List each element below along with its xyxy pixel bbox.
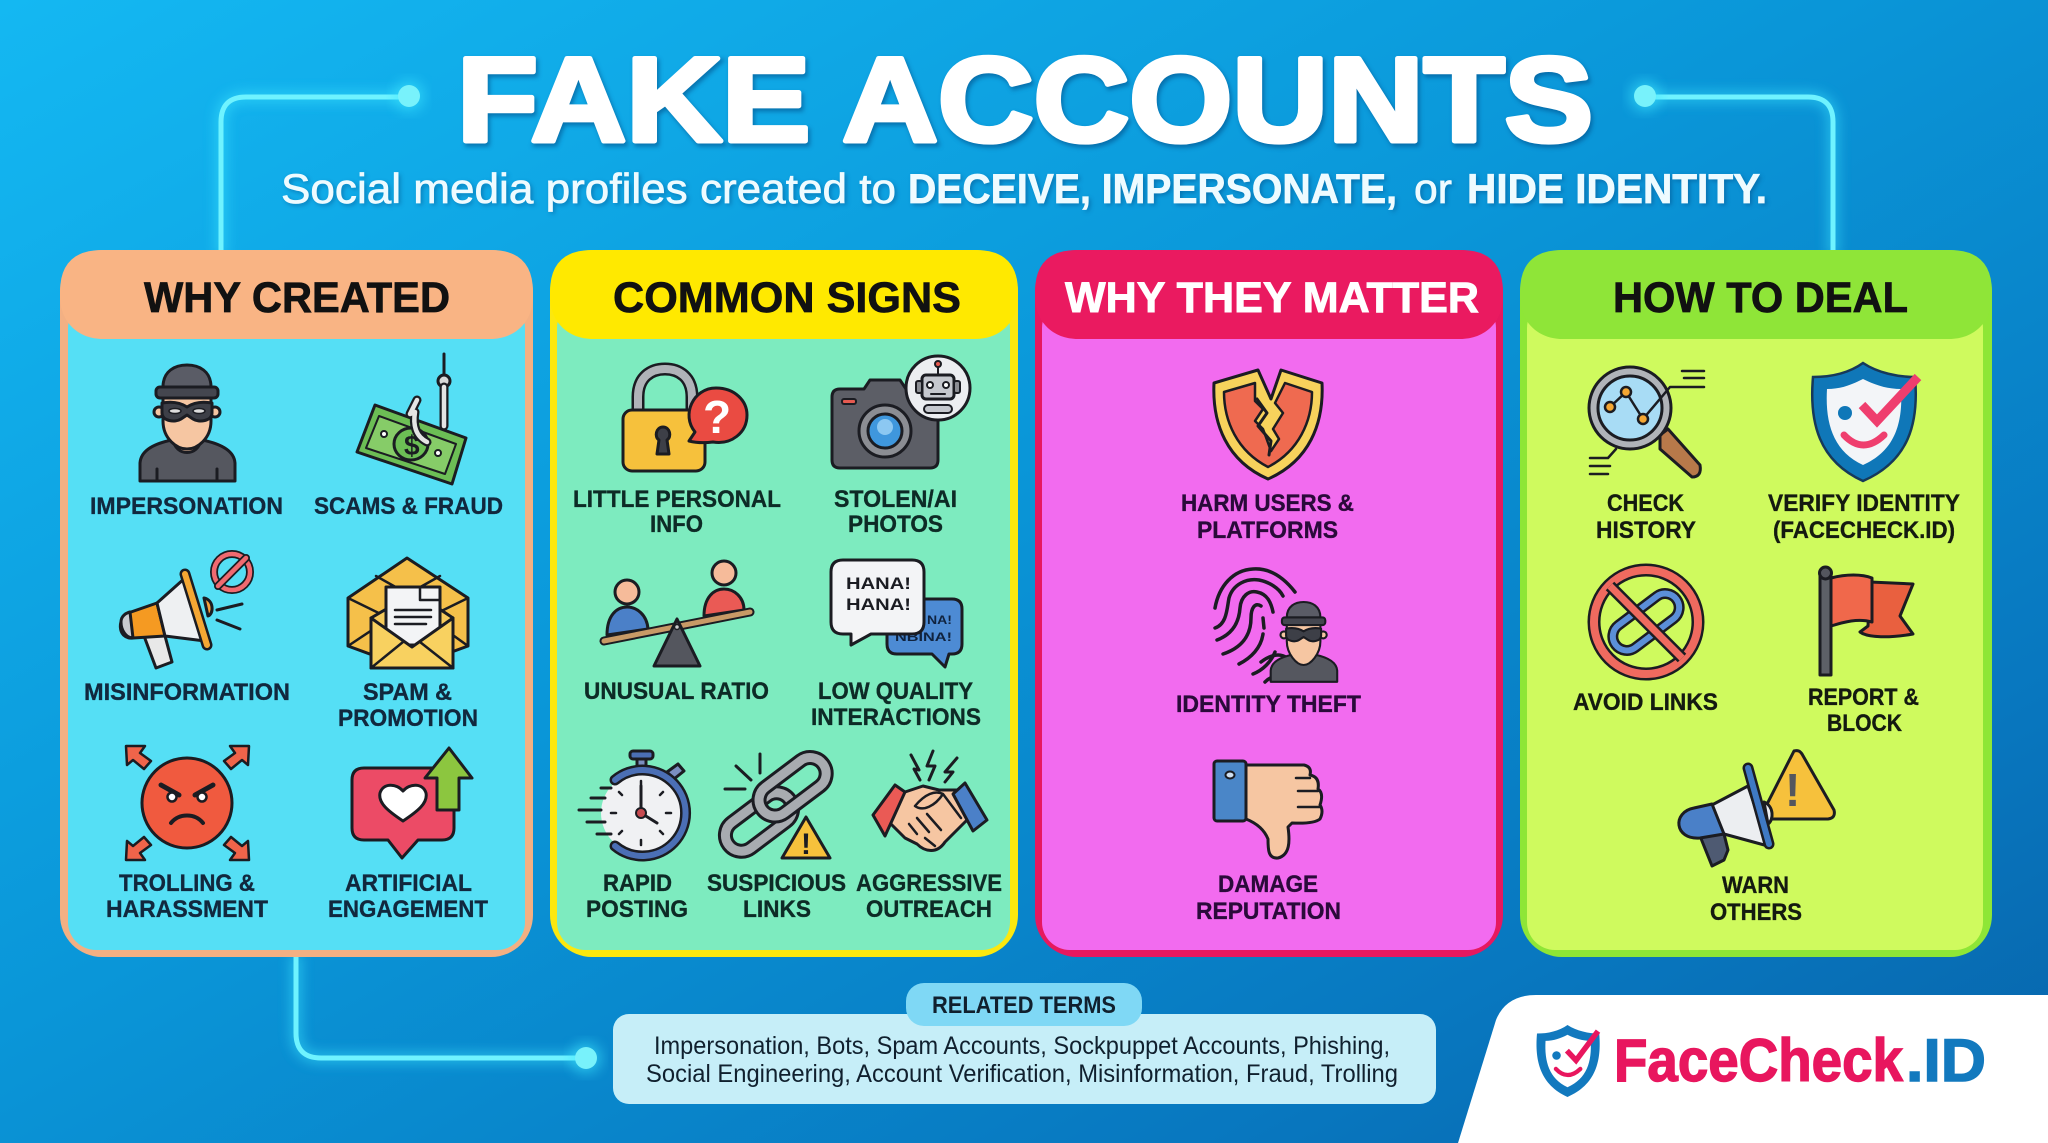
icon: camera with robot [832, 356, 970, 468]
subtitle: or [1414, 165, 1452, 212]
panel: why created [60, 250, 533, 957]
icon: heart bubble with up arrow [352, 748, 472, 858]
connector: bottom left circuit line [296, 955, 602, 1074]
label: STOLEN/AI [834, 486, 957, 513]
related terms pill [906, 983, 1142, 1026]
label: PLATFORMS [1197, 517, 1338, 544]
icon: logo shield [1537, 1025, 1600, 1097]
panel header: why they matter: WHY THEY MATTER [1065, 274, 1479, 322]
logo wordmark: FaceCheck [1614, 1027, 1904, 1094]
icon: megaphone with warning: ! [1785, 764, 1800, 816]
label: OUTREACH [866, 896, 992, 923]
panel: why they matter [1035, 250, 1503, 957]
icon: thumbs down [1214, 761, 1322, 858]
icon: megaphone with no sign [120, 554, 250, 668]
label: DAMAGE [1218, 871, 1318, 898]
label: HARASSMENT [106, 896, 268, 923]
panel header: common signs: COMMON SIGNS [613, 274, 961, 322]
label: REPORT & [1808, 684, 1919, 711]
icon: chat bubbles: NA! [927, 615, 952, 627]
label: IDENTITY THEFT [1176, 691, 1361, 718]
item: avoid links [1573, 570, 1718, 716]
title: FAKE ACCOUNTS [457, 33, 1593, 167]
label: AGGRESSIVE [856, 870, 1002, 897]
icon: chain link with warning [719, 751, 833, 861]
item: identity theft [1176, 569, 1361, 718]
connector: top right circuit line [1629, 80, 1833, 255]
item: impersonation [90, 365, 283, 520]
item: misinformation [84, 554, 290, 706]
icon: magnifier with chart [1589, 367, 1704, 477]
label: LOW QUALITY [818, 678, 973, 705]
icon: broken shield [1214, 370, 1322, 479]
panel header: why created [60, 250, 533, 339]
label: ENGAGEMENT [328, 896, 488, 923]
icon: chat bubbles: HANA! [846, 574, 911, 593]
logo wordmark: .ID [1906, 1027, 1986, 1094]
item: damage reputation [1196, 761, 1341, 925]
related terms pill: RELATED TERMS [932, 992, 1116, 1019]
label: VERIFY IDENTITY [1768, 490, 1960, 517]
label: SPAM & [363, 679, 452, 706]
item: scams and fraud [314, 354, 503, 520]
label: REPUTATION [1196, 898, 1341, 925]
icon: chat bubbles [831, 560, 962, 667]
subtitle: or [1416, 167, 1454, 214]
subtitle [281, 165, 1769, 214]
label: AVOID LINKS [1573, 689, 1718, 716]
item: low quality interactions [811, 560, 981, 731]
item: suspicious links [707, 751, 846, 923]
label: MISINFORMATION [84, 679, 290, 706]
panel header: why they matter [1035, 250, 1503, 339]
icon: masked thief [140, 365, 235, 481]
item: rapid posting [579, 751, 688, 923]
panel header: how to deal [1520, 250, 1992, 339]
icon: padlock with question: ? [703, 391, 731, 443]
panel header: how to deal: HOW TO DEAL [1613, 274, 1908, 322]
label: LITTLE PERSONAL [573, 486, 781, 513]
label: OTHERS [1710, 899, 1802, 926]
item: warn others [1679, 751, 1834, 926]
icon: megaphone with warning [1679, 751, 1834, 866]
icon: prohibited link [1594, 570, 1698, 674]
label: RAPID [603, 870, 672, 897]
subtitle: DECEIVE, IMPERSONATE, [910, 167, 1399, 214]
subtitle: Social media profiles created to [283, 167, 898, 214]
related terms list: Social Engineering, Account Verification, Misinformation, Fraud, Trolling [646, 1060, 1398, 1088]
label: LINKS [743, 896, 811, 923]
icon: chat bubbles: NBINA! [895, 632, 952, 644]
icon: angry face with arrows [126, 746, 249, 860]
item: artificial engagement [328, 748, 488, 923]
label: TROLLING & [119, 870, 255, 897]
label: BLOCK [1827, 710, 1902, 737]
logo panel [1458, 995, 2048, 1143]
icon: padlock with question [623, 369, 747, 471]
label: INFO [650, 511, 703, 538]
label: SUSPICIOUS [707, 870, 846, 897]
item: harm users and platforms [1181, 370, 1354, 544]
item: unusual ratio [584, 561, 769, 705]
icon: envelopes [348, 558, 468, 668]
label: (FACECHECK.ID) [1773, 517, 1955, 544]
subtitle: Social media profiles created to [281, 165, 896, 212]
item: report and block [1808, 567, 1919, 737]
label: PHOTOS [848, 511, 943, 538]
icon: seesaw with people [604, 561, 750, 666]
connector: top left circuit line [221, 80, 425, 255]
panel: common signs [550, 250, 1018, 957]
icon: red flag [1820, 567, 1913, 675]
panel header: common signs [550, 250, 1018, 339]
item: trolling and harassment [106, 746, 268, 923]
icon: chat bubbles: HANA! [846, 595, 911, 614]
related terms box [613, 983, 1436, 1104]
subtitle: HIDE IDENTITY. [1467, 165, 1767, 212]
label: UNUSUAL RATIO [584, 678, 769, 705]
label: CHECK [1607, 490, 1684, 517]
subtitle: DECEIVE, IMPERSONATE, [908, 165, 1397, 212]
label: ARTIFICIAL [345, 870, 472, 897]
title: FAKE ACCOUNTS [459, 36, 1595, 170]
item: spam and promotion [338, 558, 478, 732]
icon: money on hook [357, 354, 466, 484]
label: HISTORY [1596, 517, 1696, 544]
icon: stopwatch [579, 751, 686, 856]
related terms list: Impersonation, Bots, Spam Accounts, Sockpuppet Accounts, Phishing, [654, 1032, 1390, 1060]
label: IMPERSONATION [90, 493, 283, 520]
icon: money on hook: $ [404, 430, 420, 461]
icon: handshake [873, 751, 987, 850]
label: POSTING [586, 896, 688, 923]
panel header: why created: WHY CREATED [144, 274, 450, 322]
label: HARM USERS & [1181, 490, 1354, 517]
icon: chain link with warning: ! [801, 828, 811, 861]
item: aggressive outreach [856, 751, 1002, 923]
item: stolen or AI photos [832, 356, 970, 538]
item: check history [1589, 367, 1704, 544]
item: little personal info [573, 369, 781, 538]
icon: fingerprint and thief [1215, 569, 1337, 682]
subtitle: HIDE IDENTITY. [1469, 167, 1769, 214]
label: INTERACTIONS [811, 704, 981, 731]
item: verify identity [1768, 363, 1960, 544]
panel: how to deal [1520, 250, 1992, 957]
icon: face shield with check [1812, 363, 1918, 481]
label: PROMOTION [338, 705, 478, 732]
label: WARN [1722, 872, 1789, 899]
label: SCAMS & FRAUD [314, 493, 503, 520]
